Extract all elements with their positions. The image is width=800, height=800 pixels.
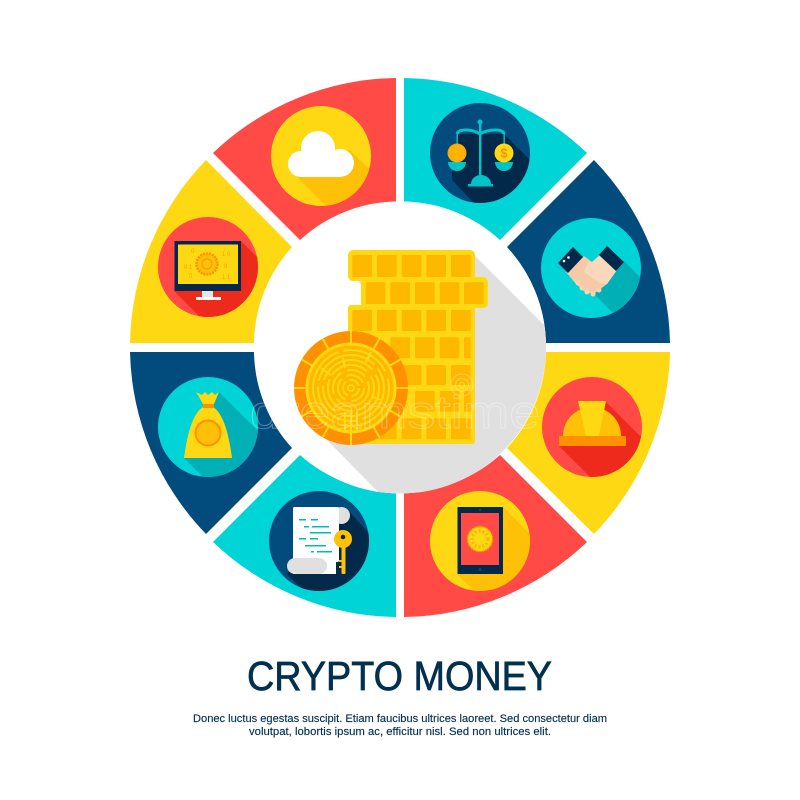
coin stack <box>348 250 488 444</box>
icon: computer monitor <box>158 217 258 317</box>
text block: description: Donec luctus egestas suscipit. Etiam faucibus ultrices laoreet. Sed consectetur diam <box>193 713 607 725</box>
icon: computer monitor: 0 <box>191 249 195 255</box>
icon: handshake <box>541 218 641 318</box>
title: CRYPTO MONEY <box>247 653 552 699</box>
text block: description <box>193 713 607 738</box>
icon: money bag <box>158 377 258 477</box>
icon: computer monitor: 0 <box>189 274 193 280</box>
panel: bottom-right red segment with tablet <box>404 455 587 617</box>
watermark: dreamstime <box>250 386 540 438</box>
icon: computer monitor: 0 1 <box>184 265 193 271</box>
icon: balance scale: $ <box>501 146 508 160</box>
icon: computer monitor: 1 0 <box>222 252 231 258</box>
panel: top-right teal segment with scale <box>404 78 587 240</box>
panel: lower-left navy segment with money bag <box>130 352 292 534</box>
watermark <box>250 374 540 438</box>
icon: hard hat <box>542 377 642 477</box>
icon: tablet <box>430 491 530 591</box>
icon: computer monitor: 1 1 <box>222 275 231 281</box>
panel: upper-right navy segment with handshake <box>507 160 670 343</box>
panel: upper-left yellow segment with monitor <box>130 160 292 343</box>
panel: top-left red segment with cloud <box>213 78 410 240</box>
panel: bottom-left teal segment with contract scroll <box>213 455 396 617</box>
panel: central white circle with coin stack <box>254 202 560 500</box>
icon: computer monitor: 8 <box>224 264 228 270</box>
icon: scroll with key <box>269 491 369 591</box>
panel: lower-right yellow segment with hard hat <box>507 352 672 534</box>
icon: balance scale <box>430 103 530 203</box>
maze coin <box>294 331 408 445</box>
icon: cloud <box>271 106 371 206</box>
text block: description: volutpat, lobortis ipsum ac, efficitur nisl. Sed non ultrices elit. <box>249 726 551 738</box>
